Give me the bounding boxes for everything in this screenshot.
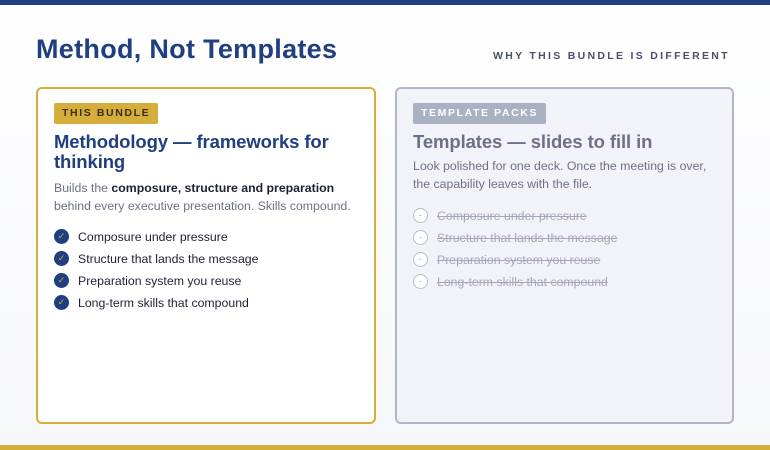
list item: Long-term skills that compound (78, 296, 249, 310)
list item: Structure that lands the message (437, 231, 617, 245)
panel: this bundle (36, 87, 376, 424)
top bar (0, 0, 770, 5)
badge (413, 103, 546, 124)
heading: Methodology — frameworks for thinking (54, 131, 329, 172)
subtitle label: WHY THIS BUNDLE IS DIFFERENT (493, 50, 730, 62)
list item: - (419, 232, 422, 242)
panel: template packs (395, 87, 734, 424)
heading: Templates — slides to fill in (413, 131, 652, 152)
list item: - (419, 210, 422, 220)
list item: Preparation system you reuse (437, 253, 600, 267)
list item: - (419, 276, 422, 286)
list item: ✓ (58, 253, 65, 263)
list item: ✓ (58, 231, 65, 241)
list item: ✓ (58, 275, 65, 285)
description: Look polished for one deck. Once the meeting is over, the capability leaves with the file. (413, 159, 706, 190)
list item: Composure under pressure (437, 209, 587, 223)
list item: - (419, 254, 422, 264)
list item: Structure that lands the message (78, 252, 258, 266)
badge: THIS BUNDLE (62, 107, 150, 119)
badge (54, 103, 158, 124)
list item: Preparation system you reuse (78, 274, 241, 288)
list item: Composure under pressure (78, 230, 228, 244)
description: Builds the composure, structure and preparation behind every executive presentation. Skills compound. (54, 181, 351, 212)
badge: TEMPLATE PACKS (421, 107, 538, 119)
bottom bar (0, 445, 770, 450)
list item: Long-term skills that compound (437, 275, 608, 289)
list item: ✓ (58, 297, 65, 307)
title: Method, Not Templates (36, 34, 337, 64)
